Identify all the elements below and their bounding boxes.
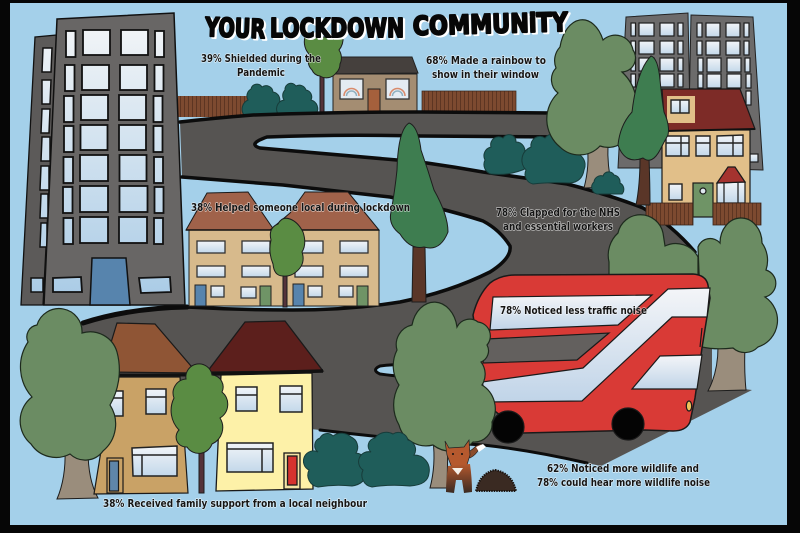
tree in front of bus: trunk [430,440,448,488]
green front door [693,183,713,217]
centre tall tree [390,123,448,302]
fences by right house [646,203,761,225]
brown house [94,323,197,494]
yellow house [207,321,323,491]
label: clapped for NHS: and essential workers [503,221,613,233]
small shrub by trunk [592,172,624,194]
tree trunk behind bus right [708,347,746,391]
bottom left tree crown [20,309,119,460]
label: wildlife: 78% could hear more wildlife noise [537,477,710,489]
shrubs by top house [242,83,318,115]
red double decker bus [473,274,710,443]
label: shielded: 39% Shielded during the [201,53,321,65]
label: rainbow [426,55,546,81]
label: family support: 38% Received family support from a local neighbour [103,498,368,510]
green tree between semis [270,218,305,307]
big tree trunk [584,145,612,188]
title word: YOUR: YOUR [204,13,266,45]
big tree crown [547,20,637,155]
label: clapped for NHS [496,207,620,233]
right detached house [662,89,755,217]
rainbow window right [386,79,409,99]
left tower block [21,13,185,305]
label: traffic noise: 78% Noticed less traffic noise [500,305,647,317]
shrubs right of road [484,134,585,184]
small sky gap near bus [376,364,440,378]
label: shielded [201,53,321,79]
bay window [717,167,745,203]
title word: LOCKDOWN: LOCKDOWN [270,14,404,44]
label: clapped for NHS: 78% Clapped for the NHS [496,207,620,219]
semi-detached houses [186,192,379,306]
top house with rainbow windows [332,57,418,113]
tree behind bus left [608,215,698,280]
label: rainbow: 68% Made a rainbow to [426,55,546,67]
bus headlight [686,401,692,411]
winding road [30,112,752,466]
bus wheels [492,408,644,443]
rainbow window left [340,79,363,99]
label: shielded: Pandemic [237,67,285,79]
bottom left tree trunk [57,450,98,499]
label: rainbow: show in their window [432,69,539,81]
title shadow: LOCKDOWN [272,16,406,46]
fox [445,440,486,493]
label: wildlife [537,463,710,489]
title shadow: COMMUNiTY [414,9,571,43]
road edge lines [83,112,695,463]
tower entrance door [90,258,130,305]
right tower blocks [618,13,763,170]
label: helped someone local: 38% Helped someone local during lockdown [191,202,410,214]
small tree by top house [304,37,343,112]
back tower [21,35,57,305]
title shadow: YOUR [206,14,268,47]
fence: upper right [422,91,516,112]
front tower [44,13,185,305]
title word: COMMUNITY: COMMUNiTY [412,8,569,42]
shrubs at bottom [303,432,429,487]
label: wildlife: 62% Noticed more wildlife and [547,463,699,475]
tall tree by right house [618,56,668,205]
green tree between lower houses [171,364,228,493]
tree in front of bus: crown [393,302,495,451]
fence: upper left [178,96,252,117]
hedgehog [476,470,516,491]
title shadow [206,9,571,47]
title [204,8,571,47]
tree crown behind bus right [698,218,778,353]
